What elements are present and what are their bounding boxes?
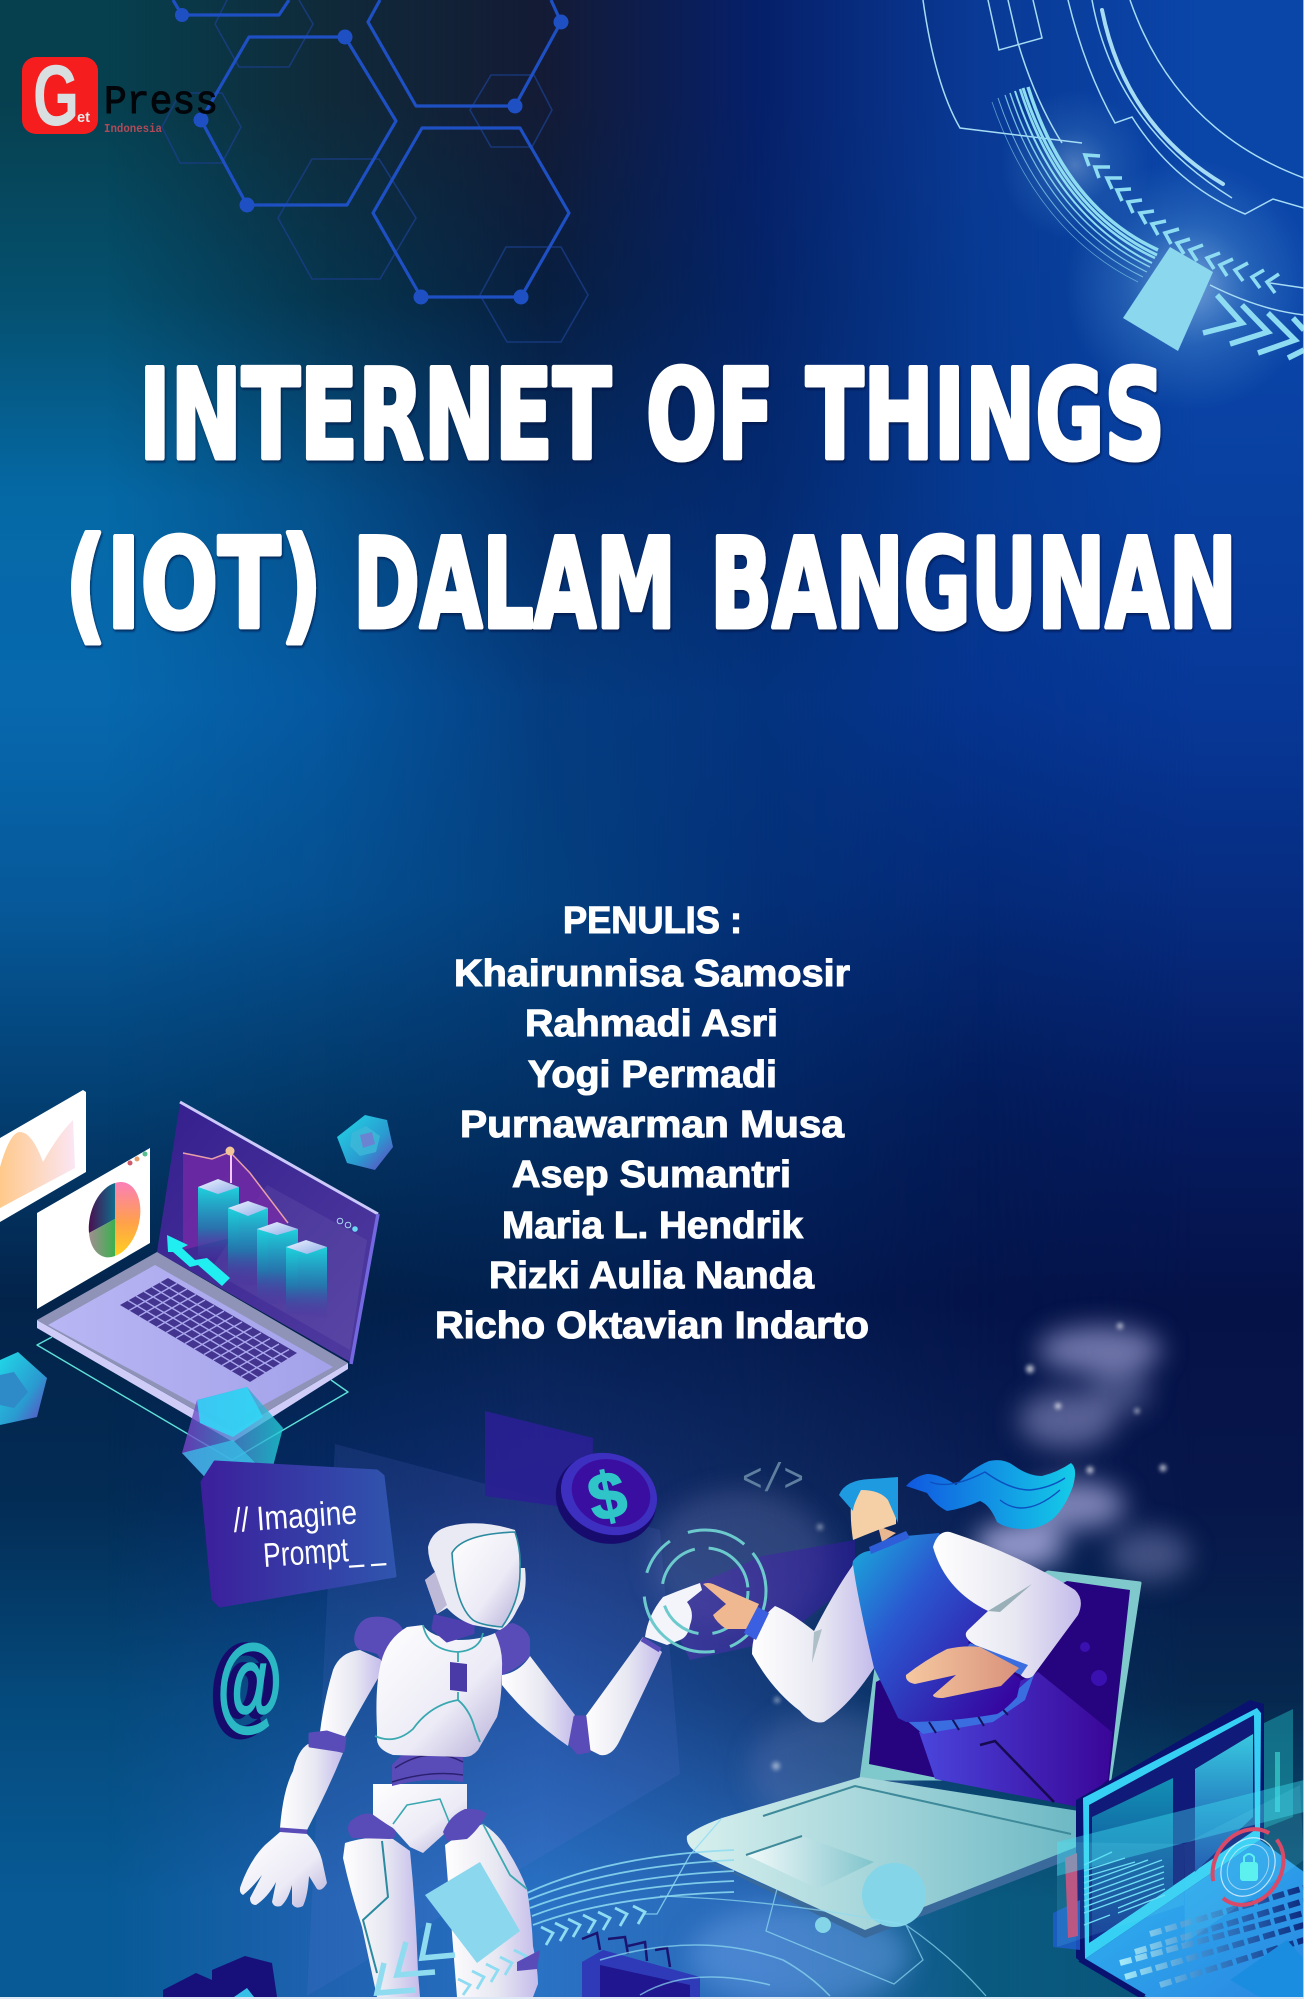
right laptop [1053, 1700, 1304, 1999]
light circle [862, 1863, 926, 1927]
robot [240, 1523, 702, 1997]
floating charts and left laptop [0, 1090, 393, 1490]
light blue square [1123, 247, 1213, 351]
lock and rings [1198, 1815, 1298, 1919]
authors list: PENULIS : [563, 900, 742, 942]
code lines [1084, 1852, 1165, 1925]
chart panel behind [1260, 1709, 1293, 1830]
robot head [425, 1523, 526, 1630]
hair [839, 1460, 1075, 1529]
robot pelvis [373, 1784, 467, 1853]
woman laptop [687, 1572, 1140, 1938]
robot neck [433, 1616, 473, 1641]
nebula clouds and stars [650, 1323, 1190, 1999]
book title: (IOT) [65, 513, 322, 657]
book title: OF [646, 344, 774, 488]
book title: INTERNET [139, 344, 611, 488]
prompt card [202, 1462, 395, 1606]
publisher logo: G [33, 48, 79, 144]
authors list: Yogi Permadi [528, 1054, 777, 1096]
authors list: Rizki Aulia Nanda [489, 1255, 815, 1297]
robot right leg [445, 1824, 538, 1997]
code tag symbol: </> [742, 1459, 804, 1504]
teal outline under laptop [37, 1337, 348, 1460]
book title: DALAM [353, 513, 676, 657]
bottom arcs and chevrons [377, 1818, 986, 1996]
prompt card: // Imagine [232, 1493, 358, 1540]
trend arrow [167, 1235, 230, 1286]
target rings [644, 1530, 766, 1652]
3d bars [198, 1179, 327, 1318]
chevron trail [1085, 155, 1279, 293]
authors list: Purnawarman Musa [460, 1104, 845, 1146]
pointing arm [703, 1565, 874, 1723]
publisher logo: Press [104, 81, 218, 126]
robot left arm [240, 1650, 382, 1908]
screen frame [1076, 1700, 1264, 1965]
translucent panels behind robot [307, 1411, 855, 1996]
book title [65, 344, 1237, 657]
cube left [0, 1352, 47, 1425]
translucent overlays [1057, 1780, 1304, 1876]
big chevrons [1203, 295, 1304, 358]
robot left leg [343, 1838, 420, 1997]
laptop keyboard deck [695, 1846, 1079, 1938]
robot shoulders [354, 1617, 410, 1677]
tech circuit arcs top right [923, 0, 1304, 410]
publisher logo: Indonesia [104, 122, 162, 136]
laptop base [37, 1252, 348, 1442]
blue and red chart bars [1053, 1900, 1080, 1950]
face [851, 1480, 896, 1540]
prompt card: Prompt_ _ [262, 1529, 387, 1575]
dollar coin [543, 1440, 669, 1558]
authors list: Khairunnisa Samosir [454, 953, 850, 995]
laptop keyboard base [1085, 1840, 1304, 1999]
authors list: Asep Sumantri [512, 1154, 791, 1196]
pie chart card [37, 1148, 150, 1309]
robot torso [375, 1625, 502, 1757]
robot waist [392, 1738, 463, 1786]
sweater [845, 1533, 1021, 1722]
publisher logo: et [77, 109, 90, 126]
authors list: Richo Oktavian Indarto [435, 1305, 869, 1347]
authors list: Rahmadi Asri [525, 1003, 778, 1045]
laptop screen [157, 1102, 378, 1364]
at sign icon: @ [211, 1625, 274, 1743]
keyboard [120, 1278, 297, 1382]
collar and neck [869, 1526, 910, 1554]
area chart card [0, 1090, 86, 1222]
dollar coin: $ [582, 1455, 633, 1536]
at sign icon: @ [217, 1623, 283, 1741]
cube top right [337, 1115, 393, 1170]
light square on robot leg [425, 1862, 520, 1963]
folder icon [163, 1956, 277, 1997]
woman reaching out of the laptop [703, 1460, 1081, 1734]
authors list [435, 900, 869, 1347]
waistband [906, 1675, 1034, 1734]
trackpad [746, 1836, 874, 1889]
keys [1120, 1888, 1304, 1985]
factory icon [582, 1933, 700, 1997]
publisher logo [22, 48, 218, 144]
hexagon network top [162, 0, 588, 342]
authors list: Maria L. Hendrik [502, 1205, 804, 1247]
translucent cube under laptop [182, 1387, 283, 1490]
robot right arm [502, 1583, 702, 1755]
bent arm [906, 1532, 1081, 1698]
